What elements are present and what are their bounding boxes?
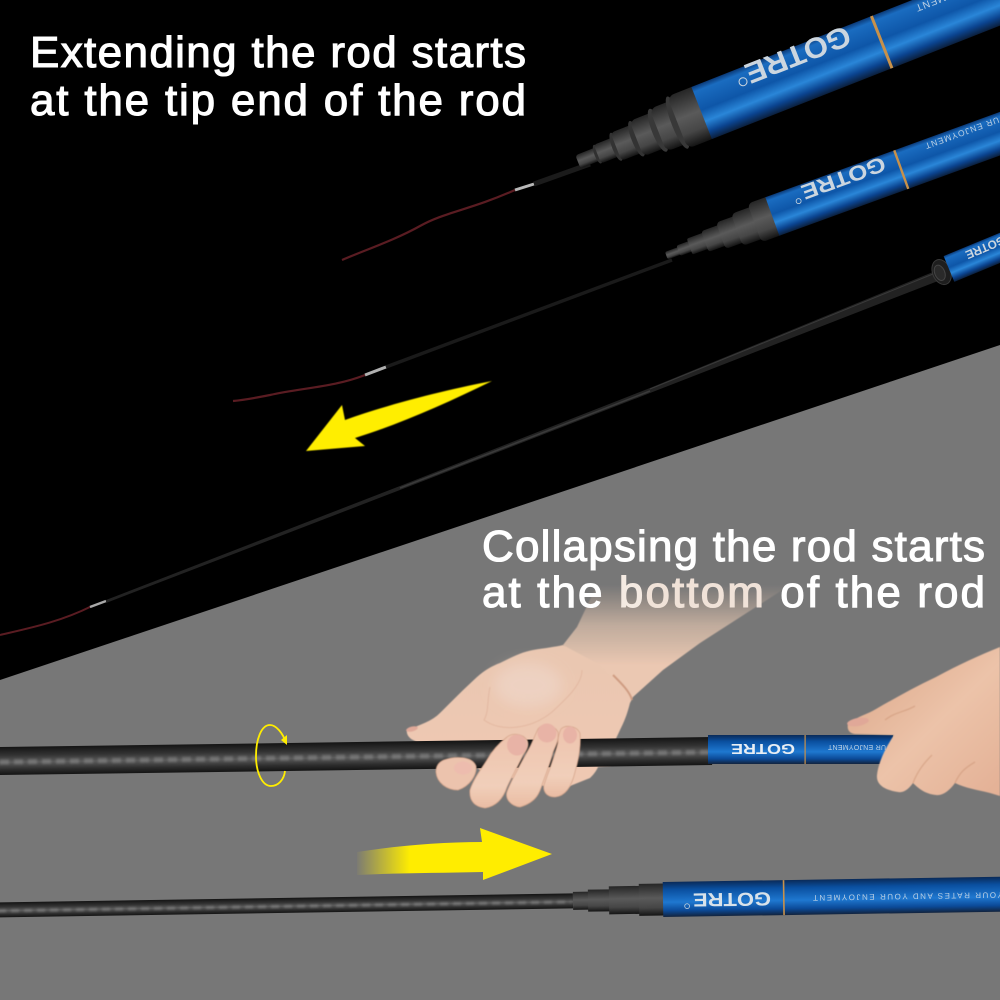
lower carbon section [0,893,573,918]
right thumb nail [846,716,870,728]
rod 1: partly extended blue rod [342,0,1000,260]
left hand fingers [436,724,580,808]
left forearm fading upward [563,585,790,700]
telescoping rings [573,883,664,917]
left hand palm and thumb [406,645,633,790]
right hand [846,647,1000,796]
arrow: yellow collapse direction [357,828,552,880]
blue handle: GOTRE [693,887,771,910]
rod 2: further extended blue rod [233,102,1000,401]
third finger [507,724,558,807]
rod 3: fully extended rod [0,229,1000,635]
title: extending instructions: Extending the rod starts [30,28,526,77]
rod 3 tip line [0,272,938,635]
rotation arrowhead [281,735,287,745]
carbon section [0,737,712,775]
rod 1 tip line [342,164,590,260]
rod 1 handle and telescoping sections [565,0,1000,188]
rod in hands: carbon section and blue handle [0,735,893,775]
rotation indicator [256,725,287,786]
title: extending instructions [30,28,526,125]
tucked finger [436,758,476,790]
palm creases [484,670,582,728]
blue handle with logo: GOTRE [731,740,795,757]
panel: gray diagonal lower background [0,345,1000,1000]
title: collapsing instructions: at the bottom of the rod [482,568,985,617]
blue handle with logo [708,735,893,764]
rod 2 handle and telescoping sections [658,102,1000,274]
blue handle [663,877,1000,917]
arrow: yellow extend direction [306,381,492,451]
title: collapsing instructions: Collapsing the rod starts [482,522,985,571]
rod 2 tip line [233,260,672,401]
finger separations [885,706,975,783]
second finger [470,734,528,808]
title: collapsing instructions [482,522,985,617]
lower rod: carbon sections and blue handle [0,877,1000,928]
rod 2 handle and telescoping sections: GOTRE [798,152,889,203]
blue handle with logo: UR ENJOYMENT [827,743,886,750]
rod 1 handle and telescoping sections: GOTRE [740,19,855,89]
title: extending instructions: at the tip end of the rod [30,76,526,125]
blue handle: YOUR RATES AND YOUR ENJOYMENT [813,890,1000,902]
rod 3 handle [928,229,1000,288]
palm light patch [494,663,562,707]
fourth finger [544,726,580,797]
